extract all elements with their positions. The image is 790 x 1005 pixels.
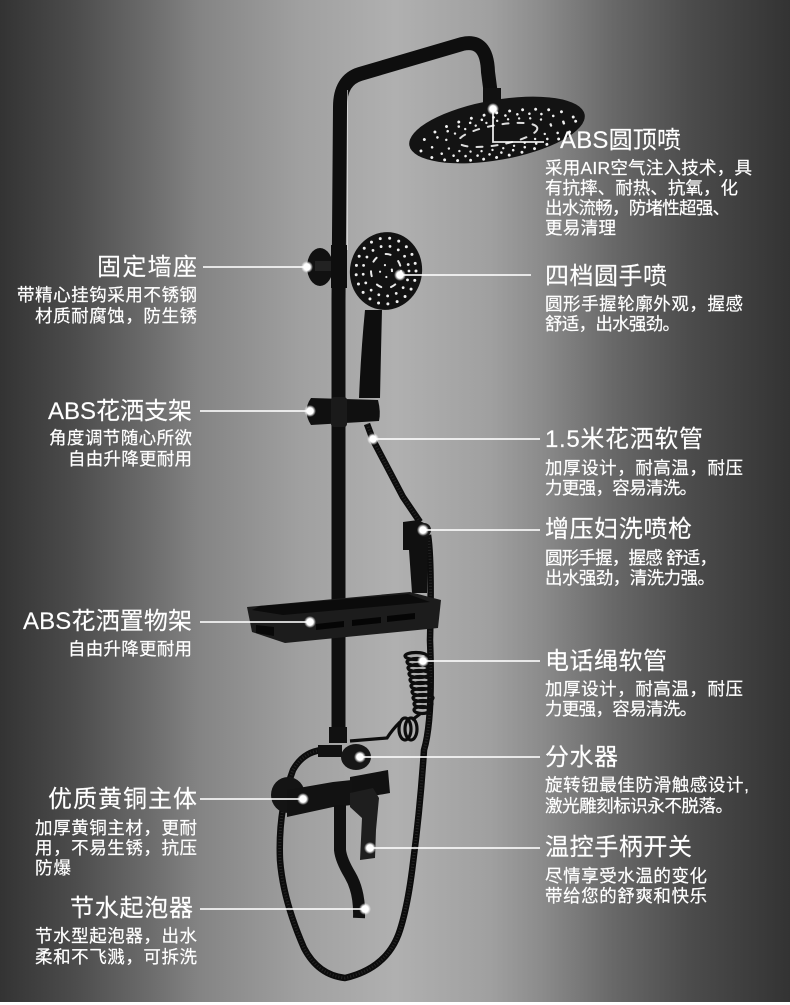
label: brass body: 用，不易生锈，抗压 bbox=[35, 838, 197, 858]
label: aerator bbox=[35, 895, 198, 967]
label: handle: 尽情享受水温的变化 bbox=[545, 866, 707, 886]
label: spray gun: 出水强劲，清洗力强。 bbox=[545, 568, 715, 588]
label: hose: 1.5米花洒软管 bbox=[545, 426, 703, 453]
label: round hand shower: 四档圆手喷 bbox=[545, 263, 667, 290]
label: aerator: 柔和不飞溅，可拆洗 bbox=[35, 947, 198, 967]
label: brass body: 优质黄铜主体 bbox=[48, 786, 197, 813]
label: basket bbox=[23, 608, 192, 659]
label: ABS dome shower: 采用AIR空气注入技术，具 bbox=[545, 158, 752, 178]
label: wall mount bbox=[17, 254, 197, 326]
label: bracket: 自由升降更耐用 bbox=[68, 449, 192, 469]
label: diverter: 激光雕刻标识永不脱落。 bbox=[545, 796, 733, 816]
label: diverter: 旋转钮最佳防滑触感设计, bbox=[545, 775, 749, 795]
label: spray gun bbox=[545, 516, 717, 588]
label: ABS dome shower bbox=[545, 127, 752, 238]
icon: long hose loop bbox=[280, 535, 431, 978]
icon: aerator spout bbox=[340, 805, 359, 918]
label: ABS dome shower: 更易清理 bbox=[545, 218, 616, 238]
label: spray gun: 增压妇洗喷枪 bbox=[545, 516, 692, 543]
icon: coiled hose bbox=[350, 652, 433, 741]
label: coil hose: 加厚设计，耐高温，耐压 bbox=[545, 679, 743, 699]
label: basket: ABS花洒置物架 bbox=[23, 608, 192, 635]
label: ABS dome shower: 出水流畅，防堵性超强、 bbox=[545, 198, 730, 218]
icon: wall mount bbox=[307, 245, 347, 288]
icon: shower hose bbox=[367, 424, 420, 522]
label: round hand shower bbox=[545, 263, 743, 334]
label: coil hose: 力更强，容易清洗。 bbox=[545, 699, 697, 719]
icon: hand shower bbox=[343, 225, 429, 398]
label: basket: 自由升降更耐用 bbox=[68, 639, 192, 659]
callout lines and dots bbox=[200, 103, 544, 915]
label: handle: 带给您的舒爽和快乐 bbox=[545, 886, 707, 906]
label: hose: 加厚设计，耐高温，耐压 bbox=[545, 458, 743, 478]
icon: slider bracket bbox=[306, 397, 380, 427]
rail and top arm bbox=[329, 43, 491, 743]
icon: rain shower head bbox=[404, 85, 590, 175]
label: coil hose bbox=[545, 648, 743, 719]
label: ABS dome shower: ABS圆顶喷 bbox=[560, 127, 681, 154]
label: brass body: 防爆 bbox=[35, 858, 72, 878]
label: brass body bbox=[35, 786, 197, 878]
label: hose: 力更强，容易清洗。 bbox=[545, 478, 697, 498]
label: wall mount: 材质耐腐蚀，防生锈 bbox=[35, 306, 197, 326]
label: bracket: ABS花洒支架 bbox=[48, 398, 192, 425]
label: round hand shower: 圆形手握轮廓外观，握感 bbox=[545, 294, 743, 314]
icon: storage basket bbox=[247, 592, 441, 643]
label: brass body: 加厚黄铜主材，更耐 bbox=[35, 818, 197, 838]
icon: bidet spray gun bbox=[403, 520, 431, 593]
label: diverter: 分水器 bbox=[545, 744, 618, 771]
label: bracket: 角度调节随心所欲 bbox=[49, 428, 192, 448]
label: wall mount: 带精心挂钩采用不锈钢 bbox=[17, 285, 197, 305]
label: bracket bbox=[48, 398, 192, 469]
label: ABS dome shower: 有抗摔、耐热、抗氧，化 bbox=[545, 178, 738, 198]
shower product bbox=[247, 43, 590, 978]
label: handle bbox=[545, 834, 707, 906]
label: wall mount: 固定墙座 bbox=[97, 254, 197, 281]
label: diverter bbox=[545, 744, 749, 816]
label: aerator: 节水型起泡器，出水 bbox=[35, 926, 198, 946]
icon: diverter bbox=[318, 744, 390, 800]
label: aerator: 节水起泡器 bbox=[70, 895, 193, 922]
icon: brass body bbox=[271, 777, 352, 817]
label: handle: 温控手柄开关 bbox=[545, 834, 692, 861]
icon: temperature handle bbox=[350, 788, 379, 860]
label: coil hose: 电话绳软管 bbox=[545, 648, 667, 675]
label: round hand shower: 舒适，出水强劲。 bbox=[545, 314, 680, 334]
label: hose bbox=[545, 426, 743, 498]
label: spray gun: 圆形手握，握感 舒适， bbox=[545, 548, 717, 568]
